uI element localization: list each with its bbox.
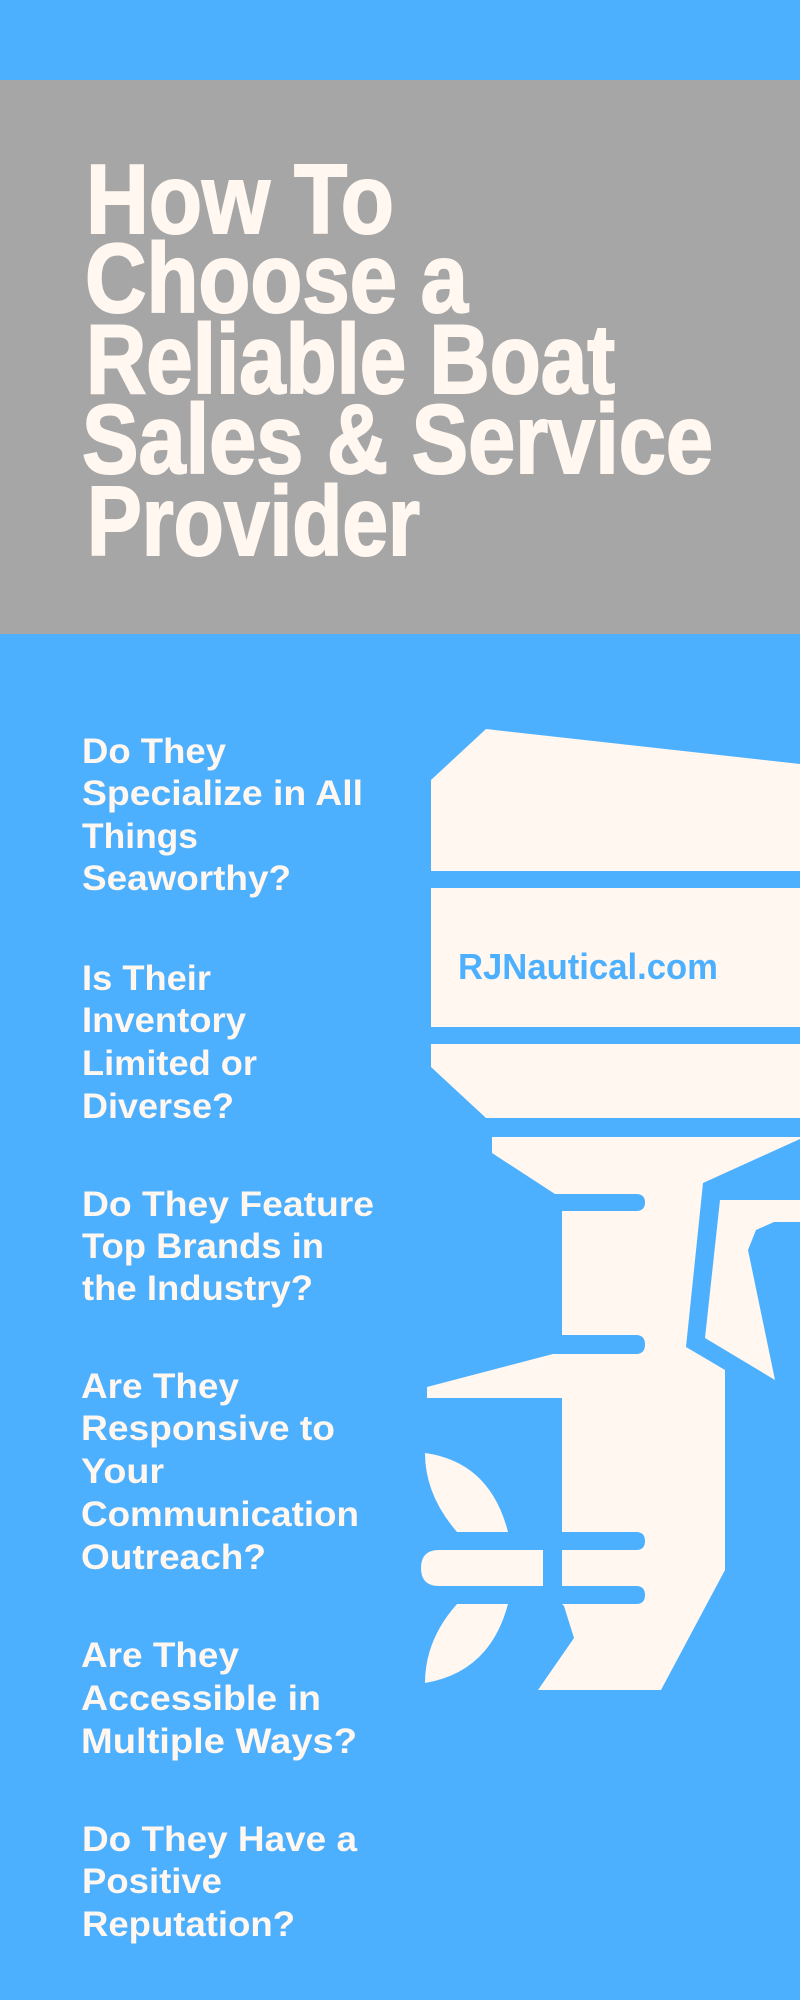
question list: Inventory	[82, 1001, 247, 1040]
question list: Top Brands in	[82, 1227, 324, 1266]
question list: Seaworthy?	[82, 859, 291, 898]
brand text: RJNautical.com	[458, 946, 718, 987]
title	[82, 144, 713, 576]
question list: Reputation?	[82, 1905, 295, 1944]
question list: Are They	[81, 1636, 240, 1675]
question list: Communication	[81, 1495, 359, 1534]
title panel background	[0, 80, 800, 634]
question list	[81, 732, 374, 1944]
question list: Diverse?	[82, 1087, 234, 1126]
question list: Responsive to	[81, 1409, 335, 1448]
title: How To	[86, 144, 394, 254]
question list: Your	[81, 1452, 164, 1491]
question list: Multiple Ways?	[81, 1722, 357, 1761]
question list: Do They	[82, 732, 227, 771]
title: Choose a	[85, 223, 469, 333]
motor cutout stripes	[553, 1194, 645, 1604]
question list: Is Their	[82, 959, 211, 998]
icon: outboard motor	[421, 729, 800, 1690]
question list: Do They Feature	[82, 1185, 374, 1224]
question list: Accessible in	[81, 1679, 321, 1718]
title: Sales & Service	[82, 384, 713, 494]
question list: Positive	[82, 1862, 222, 1901]
title: Reliable Boat	[86, 304, 615, 414]
question list: the Industry?	[82, 1269, 313, 1308]
question list: Outreach?	[81, 1538, 266, 1577]
question list: Specialize in All	[82, 774, 363, 813]
title: Provider	[87, 466, 420, 576]
question list: Limited or	[82, 1044, 257, 1083]
question list: Do They Have a	[82, 1820, 358, 1859]
question list: Are They	[81, 1367, 240, 1406]
question list: Things	[82, 817, 198, 856]
